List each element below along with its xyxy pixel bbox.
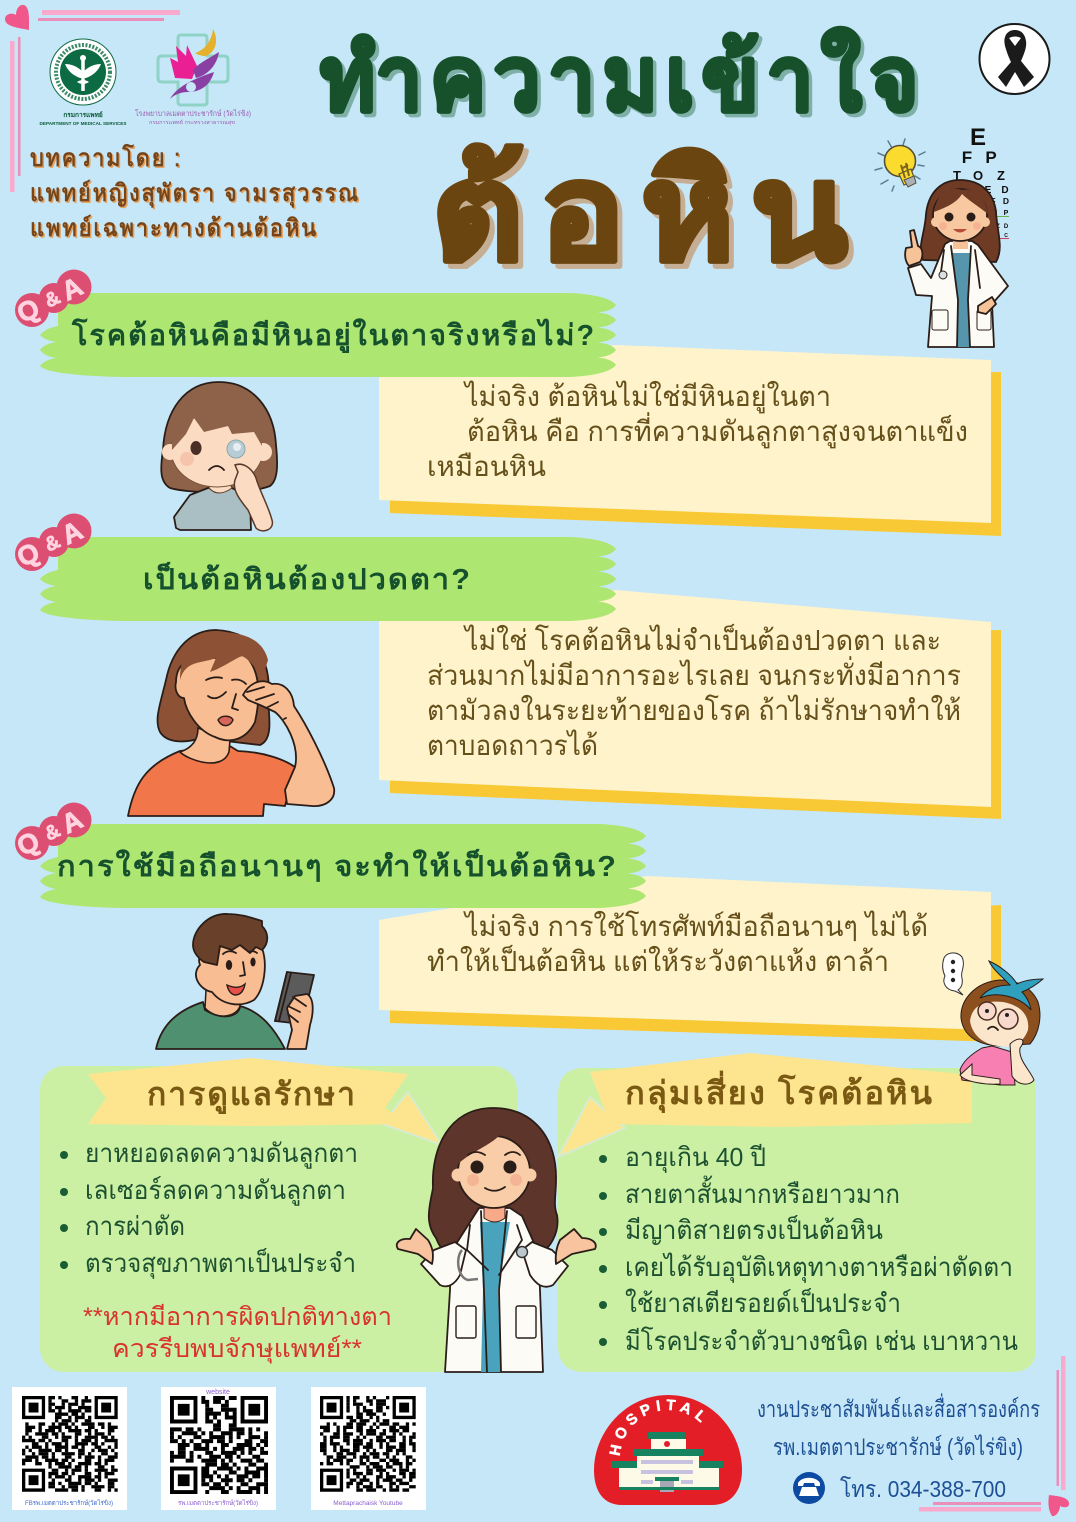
logo: Metta Pracharak hospital: โรงพยาบาลเมตตาประชารักษ์ (วัดไร่ขิง) [135, 109, 251, 118]
logo: Ministry of Public Health [40, 39, 126, 126]
risk list: มีญาติสายตรงเป็นต้อหิน [625, 1214, 883, 1245]
logo: hospital badge: HOSPITAL [609, 1399, 704, 1456]
title line 2: ต้อหิน [432, 139, 864, 288]
Q&A badge 2 [12, 514, 92, 573]
byline [30, 144, 362, 244]
logo: Metta Pracharak hospital: กรมการแพทย์ กระทรวงสาธารณสุข [149, 119, 235, 126]
contact information: โทร. 034-388-700 [840, 1476, 1006, 1502]
question banner 2 [40, 537, 616, 621]
Q&A badge 2: & [41, 531, 64, 557]
heading ribbon: treatment: การดูแลรักษา [147, 1076, 357, 1115]
eye chart: Z [996, 224, 1000, 230]
byline: แพทย์หญิงสุพัตรา จามรสุวรรณ [32, 180, 362, 210]
question banner 3: การใช้มือถือนานๆ จะทำให้เป็นต้อหิน? [57, 848, 618, 883]
title line 2: ต้อหิน [437, 144, 869, 293]
Q&A badge 3: A [57, 804, 87, 840]
byline: แพทย์เฉพาะทางด้านต้อหิน [30, 214, 318, 242]
answer card 2: ตามัวลงในระยะท้ายของโรค ถ้าไม่รักษาจทำให้ [427, 694, 961, 726]
Q&A badge 3: & [41, 820, 64, 846]
answer card 1: เหมือนหิน [427, 451, 546, 482]
QR code: Facebook [12, 1387, 127, 1510]
eye chart: D [1003, 196, 1009, 206]
eye chart [953, 124, 1009, 239]
icon: light bulb [875, 139, 925, 191]
answer card 1 [379, 345, 1001, 536]
illustration: thinking girl [943, 953, 1043, 1085]
question banner 1 [40, 293, 616, 377]
answer card 3: ไม่จริง การใช้โทรศัพท์มือถือนานๆ ไม่ได้ [463, 910, 928, 942]
illustration: girl with glaucoma eye [161, 382, 277, 531]
risk list [599, 1142, 1018, 1356]
eye chart: P [985, 148, 997, 167]
eye chart: D [1004, 224, 1009, 230]
title line 1: ทำความเข้าใจ [320, 28, 926, 130]
eye chart: C [1004, 233, 1008, 239]
panel: question and answer 2 [12, 514, 1001, 819]
answer card 3 [379, 876, 1001, 1042]
answer card 1: ต้อหิน คือ การที่ความดันลูกตาสูงจนตาแข็ง [467, 412, 968, 449]
treatment list: ยาหยอดลดความดันลูกตา [85, 1138, 358, 1169]
eye chart: F [962, 148, 972, 167]
warning note: **หากมีอาการผิดปกติทางตา [83, 1303, 392, 1331]
warning note [83, 1303, 392, 1364]
treatment list: เลเซอร์ลดความดันลูกตา [85, 1175, 346, 1206]
Q&A badge 1: & [41, 287, 64, 313]
heading ribbon: risk groups: กลุ่มเสี่ยง โรคต้อหิน [625, 1070, 934, 1114]
question banner 2: เป็นต้อหินต้องปวดตา? [143, 561, 472, 596]
panel: treatment [40, 1058, 517, 1372]
treatment list [60, 1138, 358, 1279]
byline: บทความโดย : [30, 144, 182, 172]
logo: Ministry of Public Health: กรมการแพทย์ [63, 111, 103, 119]
title line 1: ทำความเข้าใจ [324, 32, 930, 134]
logo: Metta Pracharak hospital [135, 29, 251, 126]
treatment list: ตรวจสุขภาพตาเป็นประจำ [85, 1247, 356, 1279]
eye chart: O [973, 168, 983, 183]
heading ribbon: treatment [88, 1058, 442, 1145]
contact information: รพ.เมตตาประชารักษ์ (วัดไร่ขิง) [773, 1434, 1023, 1460]
illustration: woman rubbing eye [128, 630, 334, 816]
eye chart: Z [997, 168, 1005, 183]
question banner 1: โรคต้อหินคือมีหินอยู่ในตาจริงหรือไม่? [71, 317, 596, 353]
Q&A badge 1 [12, 270, 92, 329]
QR code: Facebook: FBรพ.เมตตาประชารักษ์(วัดไร่ขิง) [25, 1499, 113, 1507]
QR code: YouTube [311, 1387, 426, 1510]
eye chart: F [990, 196, 996, 206]
logo: Ministry of Public Health: DEPARTMENT OF MEDICAL SERVICES [40, 121, 126, 126]
answer card 3: ทำให้เป็นต้อหิน แต่ให้ระวังตาแห้ง ตาล้า [427, 944, 889, 977]
Q&A badge 3 [12, 802, 92, 862]
eye chart: E [970, 124, 986, 151]
question banner 3 [40, 824, 646, 908]
risk list: เคยได้รับอุบัติเหตุทางตาหรือผ่าตัดตา [625, 1252, 1013, 1283]
risk list: อายุเกิน 40 ปี [625, 1142, 766, 1173]
warning note: ควรรีบพบจักษุแพทย์** [112, 1335, 362, 1364]
logo: hospital badge [594, 1395, 742, 1505]
heading ribbon: risk groups [558, 1053, 972, 1157]
QR code: website [161, 1387, 276, 1510]
eye chart: Z [993, 210, 998, 217]
treatment list: การผ่าตัด [85, 1211, 185, 1241]
eye chart: D [1001, 185, 1009, 196]
risk list: สายตาสั้นมากหรือยาวมาก [625, 1175, 900, 1209]
byline: แพทย์หญิงสุพัตรา จามรสุวรรณ [30, 179, 360, 208]
Q&A badge 2: Q [12, 537, 44, 573]
QR code: website: website [205, 1389, 230, 1396]
icon: black ribbon [980, 24, 1050, 94]
decorative corner: bottom right [919, 1356, 1069, 1516]
eye chart: P [1004, 210, 1009, 217]
byline: บทความโดย : [32, 146, 184, 174]
byline: แพทย์เฉพาะทางด้านต้อหิน [32, 216, 320, 244]
QR code: YouTube: Mettaprachaisk Youtube [333, 1500, 403, 1507]
risk list: มีโรคประจำตัวบางชนิด เช่น เบาหวาน [625, 1326, 1018, 1356]
eye chart: T [953, 168, 961, 183]
answer card 1: ไม่จริง ต้อหินไม่ใช่มีหินอยู่ในตา [463, 380, 831, 414]
eye chart: E [985, 185, 992, 196]
answer card 2 [379, 590, 1001, 819]
Q&A badge 1: A [57, 271, 87, 307]
panel: risk groups [558, 1053, 1036, 1372]
illustration: doctor pointing [905, 180, 1008, 347]
answer card 2: ตาบอดถาวรได้ [427, 730, 598, 761]
answer card 2: ไม่ใช่ โรคต้อหินไม่จำเป็นต้องปวดตา และ [463, 623, 941, 656]
illustration: doctor presenting [397, 1108, 596, 1372]
risk list: ใช้ยาสเตียรอยด์เป็นประจำ [625, 1287, 901, 1318]
icon: telephone [793, 1472, 825, 1504]
panel: question and answer 3 [12, 802, 1001, 1049]
contact information [757, 1393, 1040, 1504]
panel: question and answer 1 [12, 270, 1001, 536]
answer card 2: ส่วนมากไม่มีอาการอะไรเลย จนกระทั่งมีอาการ [427, 656, 961, 691]
Q&A badge 1: Q [12, 293, 44, 329]
Q&A badge 3: Q [12, 826, 44, 862]
Q&A badge 2: A [57, 515, 87, 551]
decorative corner: top left [5, 5, 180, 192]
illustration: man using phone [156, 914, 314, 1049]
QR code: website: รพ.เมตตาประชารักษ์(วัดไร่ขิง) [178, 1499, 258, 1507]
